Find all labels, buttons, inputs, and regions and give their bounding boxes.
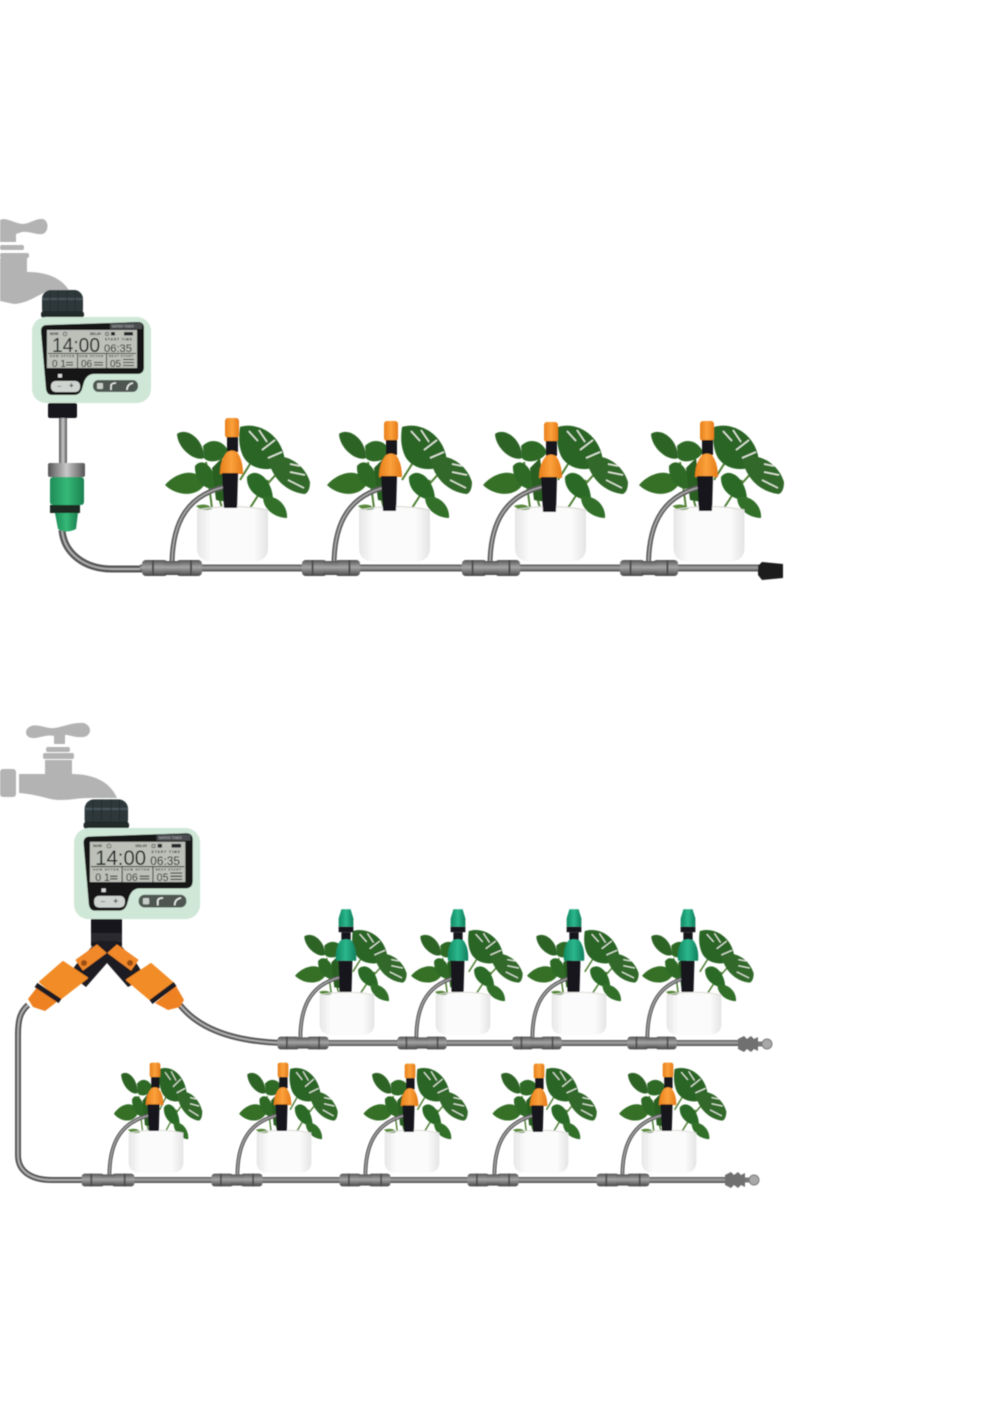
illustration — [0, 219, 784, 1188]
layout 1: single-line irrigation — [0, 219, 784, 580]
end plug (top) — [758, 562, 783, 580]
layout 2: two-line irrigation — [0, 723, 772, 1188]
lower tee connectors — [82, 1174, 649, 1186]
lower plants row — [109, 1063, 726, 1180]
icon: faucet (bottom) — [0, 723, 117, 800]
icon: faucet (top) — [0, 219, 70, 304]
hose adapter (top) — [48, 403, 85, 532]
tee connectors (top) — [142, 560, 678, 576]
upper plants row — [295, 909, 754, 1042]
supply pipe (top) — [140, 564, 760, 572]
Y splitter — [28, 918, 184, 1011]
hose to upper line — [180, 1005, 285, 1043]
upper end plug — [738, 1036, 772, 1052]
water timer (bottom) — [74, 799, 200, 919]
lower end plug — [725, 1172, 759, 1188]
upper tee connectors — [278, 1037, 677, 1049]
main hose (top) — [62, 530, 145, 569]
plants row (top) — [165, 418, 784, 571]
lower supply pipe — [85, 1177, 727, 1183]
water timer (top) — [32, 290, 151, 403]
upper supply pipe — [278, 1040, 740, 1046]
main hose to lower line — [18, 1005, 90, 1180]
